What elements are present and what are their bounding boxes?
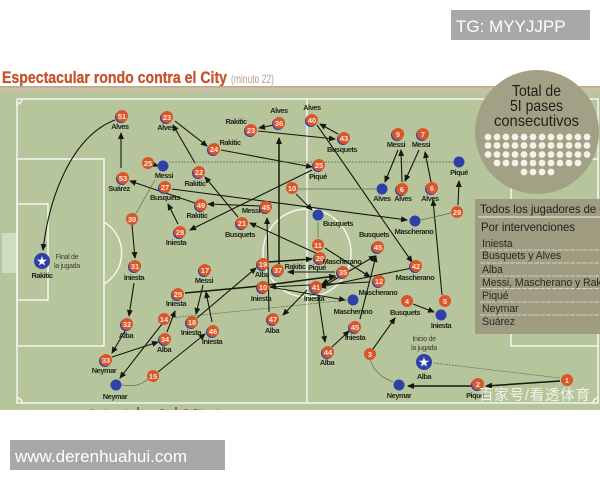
numbered passes bbox=[99, 110, 573, 391]
numbered passes: 20 bbox=[316, 254, 324, 263]
blue player markers bbox=[110, 156, 464, 390]
numbered passes: 14 bbox=[160, 315, 169, 324]
player labels: Neymar bbox=[92, 366, 117, 375]
numbered passes: 10 bbox=[259, 283, 267, 292]
watermark: baidu: 百家号/看透体育 bbox=[479, 387, 590, 404]
numbered passes: 30 bbox=[128, 215, 136, 224]
player labels: Mascherano bbox=[323, 257, 362, 266]
play start note bbox=[411, 336, 437, 352]
title: Espectacular rondo contra el City bbox=[2, 68, 227, 87]
watermark: website bbox=[10, 440, 225, 470]
panel: interventions: Busquets y Alves bbox=[482, 250, 561, 262]
numbered passes: 23 bbox=[247, 126, 255, 135]
player labels bbox=[31, 103, 484, 401]
watermark: website: www.derenhuahui.com bbox=[14, 447, 187, 466]
numbered passes: 2 bbox=[476, 380, 480, 389]
top rule bbox=[0, 86, 600, 94]
player labels: Mascherano bbox=[395, 227, 434, 236]
player labels: Messi bbox=[155, 171, 174, 180]
player labels: Alves bbox=[111, 122, 129, 131]
player labels: Neymar bbox=[103, 392, 128, 401]
legend fragment bbox=[0, 407, 300, 418]
numbered passes: 44 bbox=[324, 348, 333, 357]
total passes badge: 5I pases bbox=[510, 98, 563, 115]
numbered passes: 47 bbox=[269, 315, 277, 324]
player labels: Piqué bbox=[308, 263, 326, 272]
numbered passes: 53 bbox=[119, 174, 127, 183]
player labels: Iniesta bbox=[181, 328, 202, 337]
player labels: Busquets bbox=[150, 193, 180, 202]
player labels: Messi bbox=[242, 206, 261, 215]
numbered passes: 9 bbox=[396, 130, 400, 139]
numbered passes: 51 bbox=[118, 112, 126, 121]
numbered passes: 10 bbox=[288, 184, 296, 193]
numbered passes: 5 bbox=[443, 297, 447, 306]
panel: interventions: Alba bbox=[482, 264, 503, 276]
numbered passes: 31 bbox=[131, 262, 139, 271]
numbered passes: 24 bbox=[210, 145, 219, 154]
play start note: Inicio de bbox=[412, 336, 436, 343]
numbered passes: 28 bbox=[176, 228, 184, 237]
player labels: Iniesta bbox=[166, 238, 187, 247]
total passes badge bbox=[475, 70, 599, 194]
player labels: Alba bbox=[417, 372, 432, 381]
panel: interventions: Por intervenciones bbox=[481, 220, 575, 234]
numbered passes: 12 bbox=[375, 277, 383, 286]
numbered passes: 25 bbox=[315, 161, 323, 170]
player labels: Busquets bbox=[327, 145, 357, 154]
player labels: Alves bbox=[157, 123, 175, 132]
numbered passes: 15 bbox=[149, 372, 157, 381]
player labels: Alves bbox=[394, 194, 412, 203]
player labels: Iniesta bbox=[124, 273, 145, 282]
player labels: Busquets bbox=[323, 219, 353, 228]
player labels: Mascherano bbox=[359, 288, 398, 297]
numbered passes: 4 bbox=[405, 297, 410, 306]
player labels: Iniesta bbox=[345, 333, 366, 342]
player labels: Alba bbox=[320, 358, 335, 367]
player labels: Alba bbox=[255, 270, 270, 279]
player labels: Rakitic bbox=[219, 138, 241, 147]
player labels: Rakitic bbox=[31, 271, 53, 280]
player labels: Alves bbox=[373, 194, 391, 203]
player labels: Alba bbox=[157, 345, 172, 354]
numbered passes: 29 bbox=[453, 208, 461, 217]
numbered passes: 37 bbox=[274, 266, 282, 275]
player labels: Rakitic bbox=[284, 262, 306, 271]
player labels: Alba bbox=[119, 331, 134, 340]
numbered passes: 43 bbox=[340, 134, 348, 143]
star markers bbox=[34, 253, 432, 370]
star markers: ★ bbox=[418, 356, 430, 370]
numbered passes: 11 bbox=[314, 241, 322, 250]
numbered passes: 17 bbox=[201, 266, 209, 275]
player labels: Iniesta bbox=[202, 337, 223, 346]
numbered passes: 46 bbox=[209, 327, 217, 336]
player labels: Piqué bbox=[466, 391, 484, 400]
player labels: Messi bbox=[412, 140, 431, 149]
numbered passes: 27 bbox=[161, 183, 169, 192]
numbered passes: 49 bbox=[197, 201, 205, 210]
player labels: Messi bbox=[195, 276, 214, 285]
numbered passes: 34 bbox=[161, 335, 170, 344]
player labels: Busquets bbox=[390, 308, 420, 317]
player labels: Rakitic bbox=[184, 179, 206, 188]
play end note: Final de bbox=[56, 254, 79, 261]
numbered passes: 33 bbox=[102, 356, 110, 365]
player labels: Piqué bbox=[450, 168, 468, 177]
numbered passes: 41 bbox=[312, 283, 320, 292]
numbered passes: 40 bbox=[308, 116, 316, 125]
legend fragment: Comienzo de bbox=[90, 409, 131, 416]
watermark: TG bbox=[451, 10, 590, 40]
player labels: Mascherano bbox=[396, 273, 435, 282]
numbered passes: 7 bbox=[421, 130, 425, 139]
numbered passes: 23 bbox=[163, 113, 171, 122]
numbered passes: 3 bbox=[368, 350, 372, 359]
numbered passes: 32 bbox=[123, 320, 131, 329]
numbered passes: 25 bbox=[144, 159, 152, 168]
panel: interventions bbox=[475, 199, 600, 334]
player labels: Iniesta bbox=[251, 294, 272, 303]
player labels: Iniesta bbox=[166, 299, 187, 308]
play end note: la jugada bbox=[54, 263, 80, 270]
numbered passes: 22 bbox=[195, 168, 203, 177]
player labels: Busquets bbox=[359, 230, 389, 239]
numbered passes: 6 bbox=[430, 184, 434, 193]
numbered passes: 1 bbox=[565, 376, 569, 385]
numbered passes: 21 bbox=[238, 219, 246, 228]
numbered passes: 45 bbox=[374, 243, 382, 252]
numbered passes: 45 bbox=[262, 203, 270, 212]
watermark: TG: TG: MYYJJPP bbox=[456, 17, 566, 36]
numbered passes: 25 bbox=[174, 290, 182, 299]
title: (minuto 22) bbox=[231, 72, 274, 86]
play start note: la jugada bbox=[411, 345, 437, 352]
player labels: Alves bbox=[303, 103, 321, 112]
panel: interventions: Iniesta bbox=[482, 238, 513, 250]
numbered passes: 18 bbox=[188, 318, 196, 327]
football pitch bbox=[0, 93, 600, 410]
numbered passes: 45 bbox=[351, 323, 359, 332]
player labels: Neymar bbox=[387, 391, 412, 400]
player labels: Iniesta bbox=[304, 294, 325, 303]
total passes badge: consecutivos bbox=[494, 113, 579, 130]
panel: interventions: Suárez bbox=[482, 316, 515, 328]
numbered passes: 6 bbox=[400, 185, 404, 194]
player labels: Alves bbox=[270, 106, 288, 115]
player labels: Messi bbox=[387, 140, 406, 149]
player labels: Piqué bbox=[309, 172, 327, 181]
player labels: Busquets bbox=[225, 230, 255, 239]
player labels: Suárez bbox=[108, 184, 131, 193]
panel: interventions: Piqué bbox=[482, 290, 509, 302]
pass arrows bbox=[43, 120, 560, 386]
panel: interventions: Neymar bbox=[482, 303, 519, 315]
player labels: Mascherano bbox=[334, 307, 373, 316]
legend fragment: Pase bbox=[160, 409, 176, 416]
player labels: Alves bbox=[421, 194, 439, 203]
player labels: Rakitic bbox=[225, 117, 247, 126]
play end note bbox=[54, 254, 80, 270]
player labels: Alba bbox=[265, 326, 280, 335]
numbered passes: 42 bbox=[412, 262, 420, 271]
star markers: ★ bbox=[36, 254, 48, 270]
total passes badge: Total de bbox=[512, 83, 561, 100]
player labels: Rakitic bbox=[186, 211, 208, 220]
numbered passes: 36 bbox=[275, 119, 283, 128]
numbered passes: 35 bbox=[339, 268, 347, 277]
player labels: Iniesta bbox=[431, 321, 452, 330]
numbered passes: 19 bbox=[259, 260, 267, 269]
legend fragment: El jugador bbox=[193, 409, 226, 416]
